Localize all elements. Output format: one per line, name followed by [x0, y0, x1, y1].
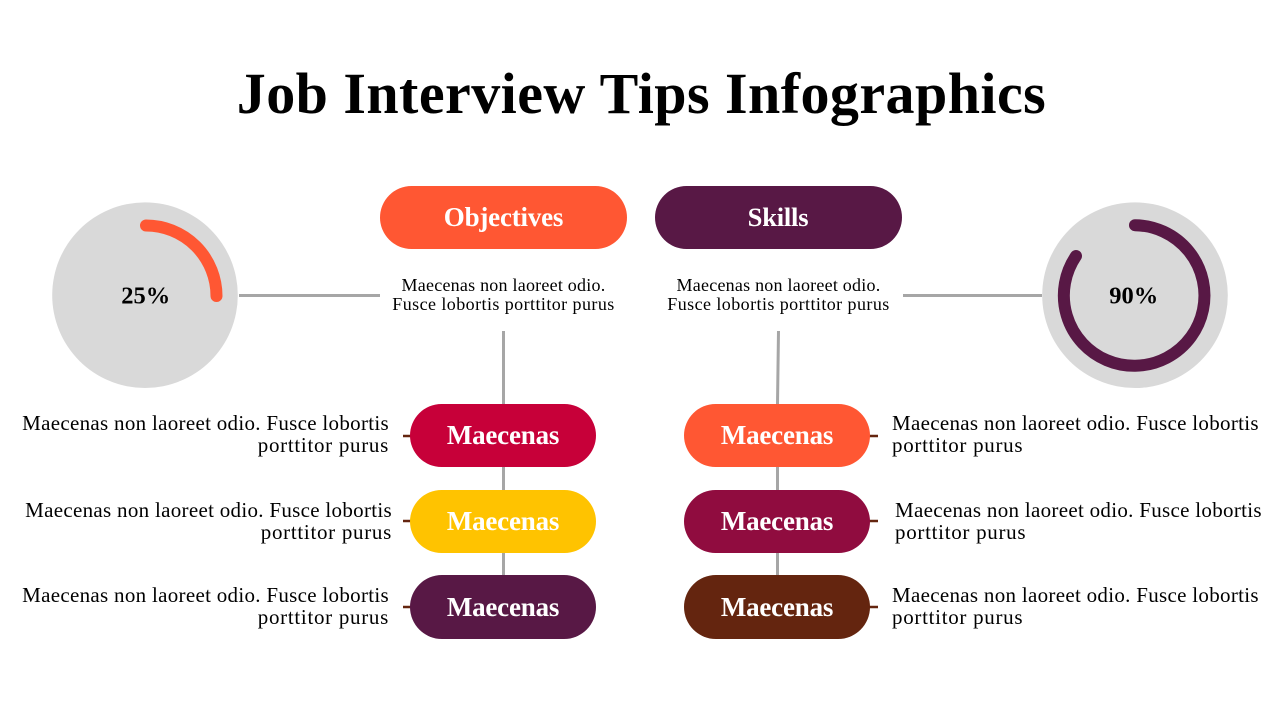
Objectives pill	[380, 186, 627, 249]
left pill 1	[410, 404, 596, 467]
left text 3	[22, 583, 389, 629]
right pill 2: Maecenas	[721, 506, 833, 536]
right pill 3: Maecenas	[721, 592, 833, 622]
right pill 1: Maecenas	[721, 420, 833, 450]
title: Job Interview Tips Infographics	[237, 61, 1046, 126]
left text 1: porttitor purus	[258, 433, 389, 457]
skills text: Maecenas non laoreet odio.	[677, 275, 880, 295]
left pill 2	[410, 490, 596, 553]
skills text: Fusce lobortis porttitor purus	[667, 294, 890, 314]
right text 1	[892, 411, 1259, 457]
left pill 1: Maecenas	[447, 420, 559, 450]
right text 1: Maecenas non laoreet odio. Fusce lobortis	[892, 411, 1259, 435]
Skills pill: Skills	[748, 202, 808, 232]
right pill 3	[684, 575, 870, 639]
right text 1: porttitor purus	[892, 433, 1023, 457]
right pill 2	[684, 490, 870, 553]
objectives text: Maecenas non laoreet odio.	[402, 275, 605, 295]
right pill 1	[684, 404, 870, 467]
left pill 3	[410, 575, 596, 639]
Skills pill	[655, 186, 902, 249]
skills text	[667, 275, 890, 314]
left pill 3: Maecenas	[447, 592, 559, 622]
left text 2: Maecenas non laoreet odio. Fusce lobortis	[25, 498, 392, 522]
right text 2: Maecenas non laoreet odio. Fusce lobortis	[895, 498, 1262, 522]
Objectives pill: Objectives	[444, 202, 563, 232]
left text 2	[25, 498, 392, 544]
left text 3: Maecenas non laoreet odio. Fusce lobortis	[22, 583, 389, 607]
left pill 2: Maecenas	[447, 506, 559, 536]
left text 3: porttitor purus	[258, 605, 389, 629]
right text 2	[895, 498, 1262, 544]
connector lines and gauges: 25%	[121, 282, 170, 310]
left text 1	[22, 411, 389, 457]
right text 3: Maecenas non laoreet odio. Fusce lobortis	[892, 583, 1259, 607]
objectives text: Fusce lobortis porttitor purus	[392, 294, 615, 314]
left text 1: Maecenas non laoreet odio. Fusce lobortis	[22, 411, 389, 435]
right text 3: porttitor purus	[892, 605, 1023, 629]
right text 2: porttitor purus	[895, 520, 1026, 544]
connector lines and gauges: 90%	[1109, 282, 1158, 310]
right text 3	[892, 583, 1259, 629]
objectives text	[392, 275, 615, 314]
left text 2: porttitor purus	[261, 520, 392, 544]
